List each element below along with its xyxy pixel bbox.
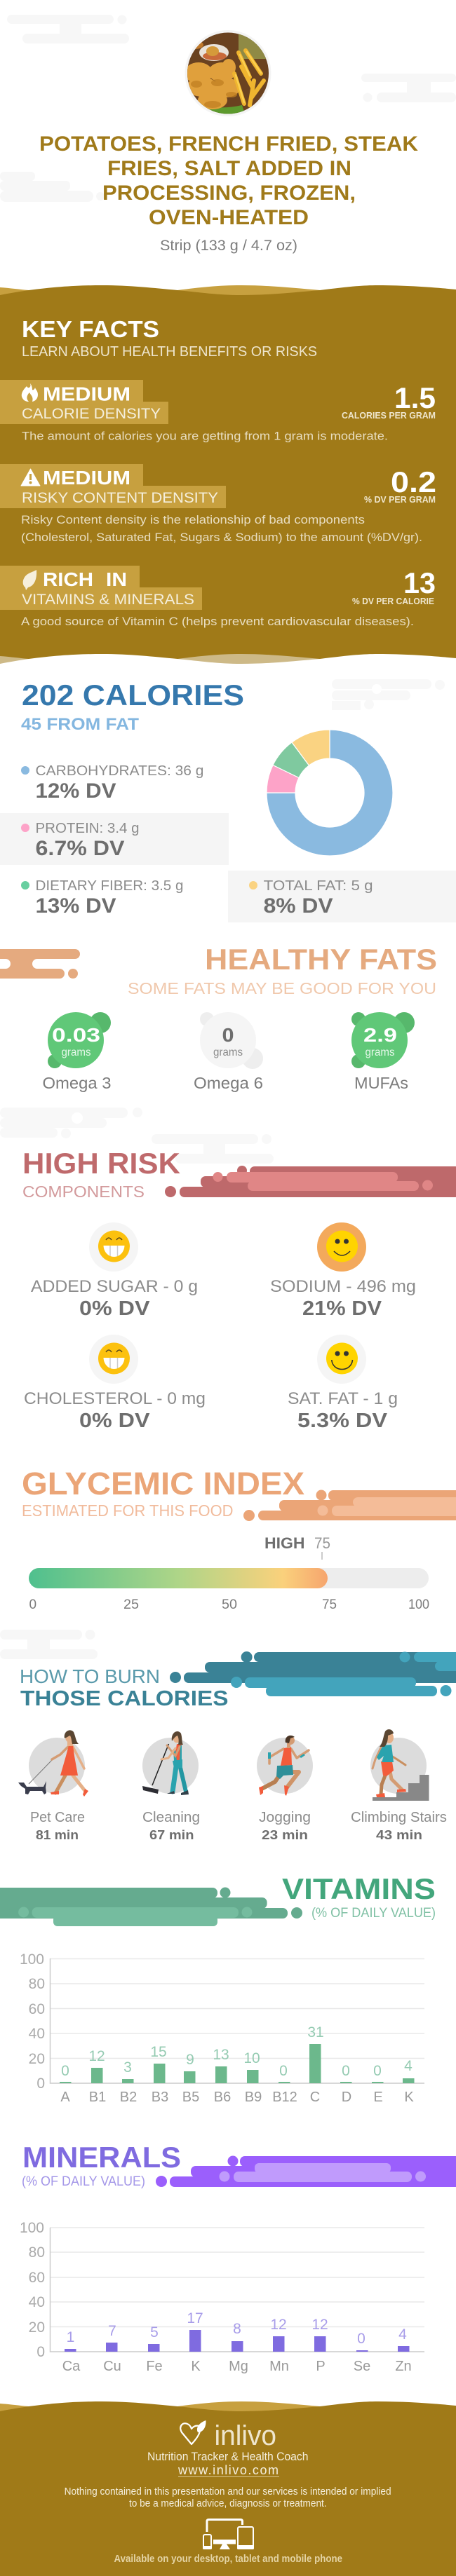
title: FRIES, SALT ADDED IN bbox=[107, 157, 351, 180]
fact: calorie density: 1.5 bbox=[394, 381, 436, 414]
bar chart: minerals: Mn bbox=[269, 2359, 289, 2374]
bar chart: minerals: 80 bbox=[29, 2244, 45, 2261]
bar chart: vitamins: 60 bbox=[29, 2001, 45, 2017]
bar chart: vitamins: 10 bbox=[243, 2050, 260, 2066]
legend: protein: PROTEIN: 3.4 g bbox=[35, 821, 139, 836]
fact: risky content density: % DV PER GRAM bbox=[364, 495, 436, 505]
serving size: Strip (133 g / 4.7 oz) bbox=[160, 238, 297, 254]
burn heading: HOW TO BURN bbox=[20, 1665, 160, 1687]
legend: dietary fiber: DIETARY FIBER: 3.5 g bbox=[35, 878, 184, 894]
icon: leaf bbox=[23, 570, 36, 590]
bar chart: minerals: 100 bbox=[20, 2220, 44, 2236]
background cloud: below healthy fats bbox=[0, 1108, 274, 1164]
bar chart: vitamins: 100 bbox=[20, 1951, 44, 1968]
website link: www.inlivo.com bbox=[177, 2463, 279, 2477]
bar chart: vitamins: 0 bbox=[61, 2063, 69, 2079]
bar chart: minerals: Mg bbox=[229, 2359, 248, 2374]
fact: calorie density: CALORIE DENSITY bbox=[22, 406, 161, 422]
bar chart: vitamins: 0 bbox=[279, 2063, 288, 2079]
healthy fats heading: HEALTHY FATS bbox=[205, 943, 437, 976]
decorative cloud: minerals bbox=[156, 2156, 456, 2187]
legend: protein bbox=[0, 813, 229, 865]
title: OVEN-HEATED bbox=[149, 206, 309, 229]
illustration: woman on stairs bbox=[373, 1729, 429, 1801]
bottom wave bbox=[0, 654, 456, 675]
bar chart: minerals: P bbox=[316, 2359, 326, 2374]
bar chart: vitamins: D bbox=[342, 2090, 351, 2105]
fact: risky content density: 0.2 bbox=[391, 465, 436, 498]
activity: jogging: 23 min bbox=[262, 1827, 308, 1842]
decorative cloud: burn calories bbox=[170, 1651, 456, 1696]
gauge scale labels: 100 bbox=[408, 1597, 429, 1612]
risk: saturated fat bbox=[288, 1335, 398, 1432]
bar chart: vitamins: 4 bbox=[404, 2058, 413, 2074]
vitamins heading bbox=[282, 1872, 436, 1921]
key facts heading: LEARN ABOUT HEALTH BENEFITS OR RISKS bbox=[22, 344, 317, 360]
high risk heading: COMPONENTS bbox=[22, 1183, 145, 1201]
legend: carbohydrates: CARBOHYDRATES: 36 g bbox=[35, 763, 203, 779]
glycemic index heading bbox=[22, 1466, 304, 1520]
stat: mufas: MUFAs bbox=[354, 1074, 408, 1092]
bar chart: minerals: 20 bbox=[29, 2319, 45, 2336]
panel: key facts bbox=[0, 285, 456, 675]
activity: pet care: 81 min bbox=[36, 1827, 79, 1842]
legend: dietary fiber: 13% DV bbox=[35, 894, 116, 918]
activity: climbing stairs: 43 min bbox=[376, 1827, 422, 1842]
burn heading: THOSE CALORIES bbox=[20, 1686, 229, 1710]
risk: cholesterol bbox=[24, 1335, 206, 1432]
risk: cholesterol: CHOLESTEROL - 0 mg bbox=[24, 1389, 206, 1408]
bar chart: minerals: 17 bbox=[187, 2310, 203, 2326]
disclaimer: to be a medical advice, diagnosis or treatment. bbox=[129, 2497, 327, 2509]
vitamins heading: VITAMINS bbox=[282, 1872, 436, 1905]
activity: pet care bbox=[18, 1730, 88, 1842]
activity: climbing stairs bbox=[351, 1729, 447, 1842]
footer wave bbox=[0, 2401, 456, 2422]
gauge scale labels: 0 bbox=[29, 1597, 36, 1612]
bar chart: vitamins: B9 bbox=[245, 2090, 262, 2105]
bar chart: vitamins: 40 bbox=[29, 2026, 45, 2042]
bar chart: minerals: 1 bbox=[67, 2329, 74, 2345]
illustration: woman sweeping bbox=[142, 1731, 189, 1795]
bar chart: minerals: 60 bbox=[29, 2270, 45, 2286]
fact: rich in vitamins and minerals bbox=[0, 566, 436, 628]
bar chart: vitamins: 31 bbox=[307, 2024, 324, 2040]
stat: omega 6: 0 bbox=[222, 1024, 234, 1046]
gauge scale labels: 50 bbox=[222, 1597, 237, 1612]
legend: protein: 6.7% DV bbox=[35, 837, 125, 860]
panel: high risk components bbox=[22, 1147, 456, 1432]
risk: sodium: SODIUM - 496 mg bbox=[270, 1277, 416, 1296]
risk: sodium bbox=[270, 1222, 416, 1320]
bar chart: vitamins: 3 bbox=[123, 2059, 132, 2076]
minerals heading: MINERALS bbox=[22, 2141, 181, 2174]
logo: inlivo: inlivo bbox=[215, 2420, 276, 2451]
activity: pet care: Pet Care bbox=[30, 1809, 85, 1825]
bar chart: minerals: Fe bbox=[146, 2359, 163, 2374]
risk: added sugar: ADDED SUGAR - 0 g bbox=[31, 1277, 198, 1296]
legend: total fat: TOTAL FAT: 5 g bbox=[264, 878, 373, 894]
title: POTATOES, FRENCH FRIED, STEAK bbox=[39, 132, 418, 156]
panel: vitamins bbox=[0, 1872, 436, 2105]
fact: rich in vitamins and minerals: A good source of Vitamin C (helps prevent cardiovascular diseases). bbox=[21, 615, 414, 628]
calories heading: 202 CALORIES bbox=[22, 679, 244, 711]
panel: how to burn those calories bbox=[18, 1651, 456, 1842]
icon: smile emoji bbox=[326, 1231, 358, 1262]
gauge scale labels bbox=[29, 1597, 429, 1612]
bar chart: vitamins: 13 bbox=[213, 2047, 229, 2063]
bar chart: vitamins: E bbox=[373, 2090, 383, 2105]
fact: calorie density bbox=[0, 380, 436, 443]
bar chart: vitamins: 9 bbox=[186, 2052, 194, 2068]
bar chart: minerals: 8 bbox=[233, 2321, 241, 2337]
icon: grin emoji bbox=[98, 1343, 130, 1374]
decorative cloud: healthy fats bbox=[0, 949, 80, 979]
background cloud: calories bbox=[332, 679, 445, 710]
activity: cleaning: Cleaning bbox=[142, 1809, 200, 1825]
tagline: Nutrition Tracker & Health Coach bbox=[147, 2450, 309, 2463]
disclaimer: Nothing contained in this presentation and our services is intended or implied bbox=[65, 2486, 391, 2497]
activity: climbing stairs: Climbing Stairs bbox=[351, 1809, 447, 1825]
bar chart: minerals: Se bbox=[354, 2359, 370, 2374]
bar chart: minerals: 7 bbox=[108, 2323, 116, 2339]
stat: omega 6: grams bbox=[213, 1047, 243, 1058]
risk: added sugar: 0% DV bbox=[79, 1297, 150, 1320]
bar chart: vitamins: B5 bbox=[182, 2090, 199, 2105]
bar chart: vitamins: 0 bbox=[373, 2063, 382, 2079]
icon: warning triangle bbox=[21, 469, 40, 486]
activity: cleaning: 67 min bbox=[149, 1827, 194, 1842]
legend: carbohydrates: 12% DV bbox=[35, 779, 116, 803]
bar chart: minerals: 12 bbox=[270, 2317, 287, 2333]
bar chart: minerals: 12 bbox=[311, 2317, 328, 2333]
key facts heading: KEY FACTS bbox=[22, 316, 159, 342]
legend: dietary fiber bbox=[21, 878, 184, 918]
high risk heading bbox=[22, 1147, 180, 1201]
key facts heading bbox=[22, 316, 317, 360]
activity: jogging: Jogging bbox=[259, 1809, 311, 1825]
bar chart: minerals: Zn bbox=[395, 2359, 412, 2374]
healthy fats heading: SOME FATS MAY BE GOOD FOR YOU bbox=[128, 979, 436, 997]
bar chart: minerals: 4 bbox=[398, 2326, 407, 2343]
stat: omega 3: 0.03 bbox=[52, 1024, 100, 1046]
food photo bbox=[185, 30, 271, 116]
fact: risky content density bbox=[0, 464, 436, 544]
bar chart: vitamins: 80 bbox=[29, 1976, 45, 1992]
gauge scale labels: 25 bbox=[123, 1597, 139, 1612]
risk: cholesterol: 0% DV bbox=[79, 1410, 150, 1432]
background cloud: left of title bbox=[0, 172, 105, 202]
fact: risky content density: RISKY CONTENT DENSITY bbox=[22, 490, 218, 506]
fact: calorie density: The amount of calories you are getting from 1 gram is moderate. bbox=[22, 429, 388, 443]
activity: jogging bbox=[257, 1736, 313, 1842]
glycemic index heading: ESTIMATED FOR THIS FOOD bbox=[22, 1501, 233, 1520]
high risk heading: HIGH RISK bbox=[22, 1147, 180, 1180]
bar chart: vitamins: 12 bbox=[88, 2048, 105, 2064]
fact: rich in vitamins and minerals: VITAMINS & MINERALS bbox=[22, 592, 194, 608]
fact: rich in vitamins and minerals: IN bbox=[106, 568, 127, 590]
title bbox=[39, 132, 418, 229]
icon: devices bbox=[203, 2519, 254, 2549]
bar chart: vitamins: C bbox=[310, 2090, 320, 2105]
bar chart: minerals bbox=[20, 2220, 424, 2374]
bar chart: vitamins: 0 bbox=[342, 2063, 350, 2079]
top wave bbox=[0, 285, 456, 306]
glycemic index heading: GLYCEMIC INDEX bbox=[22, 1466, 304, 1501]
stat: omega 3 bbox=[42, 1012, 111, 1092]
minerals heading bbox=[22, 2141, 181, 2189]
bar chart: vitamins: K bbox=[404, 2090, 414, 2105]
minerals heading: (% OF DAILY VALUE) bbox=[22, 2174, 145, 2189]
risk: saturated fat: SAT. FAT - 1 g bbox=[288, 1389, 398, 1408]
bar chart: vitamins: B2 bbox=[120, 2090, 137, 2105]
decorative cloud: high risk bbox=[165, 1166, 456, 1197]
bar chart: minerals: 0 bbox=[36, 2344, 45, 2360]
title: PROCESSING, FROZEN, bbox=[102, 182, 356, 205]
bar chart: minerals: Cu bbox=[103, 2359, 121, 2374]
stat: omega 3: Omega 3 bbox=[42, 1074, 111, 1092]
decorative cloud: vitamins bbox=[0, 1887, 302, 1926]
background cloud: burn calories bbox=[0, 1630, 98, 1659]
fact: calorie density: CALORIES PER GRAM bbox=[342, 411, 436, 421]
stat: omega 6: Omega 6 bbox=[194, 1074, 263, 1092]
fact: risky content density: (Cholesterol, Saturated Fat, Sugars & Sodium) to the amount (%DV/gr). bbox=[21, 531, 422, 544]
stat: mufas bbox=[351, 1012, 415, 1092]
bar chart: vitamins: B3 bbox=[152, 2090, 168, 2105]
fact: calorie density: MEDIUM bbox=[43, 383, 130, 405]
bar chart: vitamins: 20 bbox=[29, 2051, 45, 2067]
glycemic gauge bar bbox=[29, 1568, 429, 1588]
illustration: woman walking dog bbox=[18, 1730, 88, 1797]
risk: sodium: 21% DV bbox=[302, 1297, 382, 1320]
legend: total fat: 8% DV bbox=[264, 894, 333, 918]
bar chart: vitamins: 0 bbox=[36, 2076, 45, 2092]
fact: rich in vitamins and minerals: 13 bbox=[403, 566, 436, 599]
glycemic value label bbox=[264, 1534, 330, 1560]
calories heading: 45 FROM FAT bbox=[21, 715, 139, 734]
stat: omega 6 bbox=[194, 1012, 263, 1092]
decorative cloud: glycemic index bbox=[243, 1490, 456, 1521]
risk: saturated fat: 5.3% DV bbox=[297, 1410, 388, 1432]
vitamins heading: (% OF DAILY VALUE) bbox=[311, 1906, 436, 1921]
disclaimer bbox=[65, 2486, 391, 2509]
panel: footer bbox=[0, 2401, 456, 2576]
availability note: Available on your desktop, tablet and mobile phone bbox=[114, 2553, 342, 2565]
bar chart: minerals: K bbox=[191, 2359, 201, 2374]
illustration: man jogging bbox=[259, 1736, 309, 1796]
panel: calories bbox=[0, 679, 456, 922]
bar chart: vitamins bbox=[20, 1951, 424, 2105]
stat: mufas: 2.9 bbox=[363, 1024, 397, 1046]
donut chart bbox=[267, 730, 393, 856]
panel: glycemic index bbox=[22, 1466, 456, 1612]
glycemic value label: 75 bbox=[314, 1534, 330, 1552]
panel: minerals bbox=[20, 2141, 456, 2374]
fact: rich in vitamins and minerals: RICH bbox=[43, 568, 93, 590]
legend: total fat bbox=[228, 871, 456, 922]
bar chart: vitamins: B1 bbox=[89, 2090, 106, 2105]
calories heading bbox=[21, 679, 244, 734]
gauge scale labels: 75 bbox=[322, 1597, 337, 1612]
activity: cleaning bbox=[142, 1731, 200, 1842]
fact: rich in vitamins and minerals: % DV PER CALORIE bbox=[352, 597, 434, 606]
icon: flame bbox=[22, 383, 38, 402]
legend: carbohydrates bbox=[21, 763, 203, 803]
bar chart: minerals: 40 bbox=[29, 2294, 45, 2310]
bar chart: vitamins: B6 bbox=[214, 2090, 231, 2105]
burn heading bbox=[20, 1665, 229, 1710]
fact: risky content density: MEDIUM bbox=[43, 467, 130, 489]
stat: omega 3: grams bbox=[62, 1047, 91, 1058]
risk: added sugar bbox=[31, 1222, 198, 1320]
glycemic value label: HIGH bbox=[264, 1534, 304, 1552]
bar chart: vitamins: B12 bbox=[272, 2090, 297, 2105]
bar chart: minerals: Ca bbox=[62, 2359, 81, 2374]
background cloud: top right bbox=[361, 74, 456, 102]
logo: inlivo bbox=[180, 2420, 276, 2451]
bar chart: vitamins: 15 bbox=[150, 2044, 167, 2060]
icon: grin emoji bbox=[98, 1231, 130, 1262]
icon: smile emoji bbox=[326, 1343, 358, 1374]
healthy fats heading bbox=[128, 943, 437, 997]
bar chart: vitamins: A bbox=[60, 2090, 70, 2105]
background cloud: top left bbox=[7, 15, 129, 43]
fact: risky content density: Risky Content density is the relationship of bad components bbox=[21, 513, 365, 526]
stat: mufas: grams bbox=[365, 1047, 394, 1058]
bar chart: minerals: 5 bbox=[150, 2324, 159, 2340]
bar chart: minerals: 0 bbox=[357, 2331, 366, 2347]
panel: healthy fats bbox=[0, 943, 437, 1092]
